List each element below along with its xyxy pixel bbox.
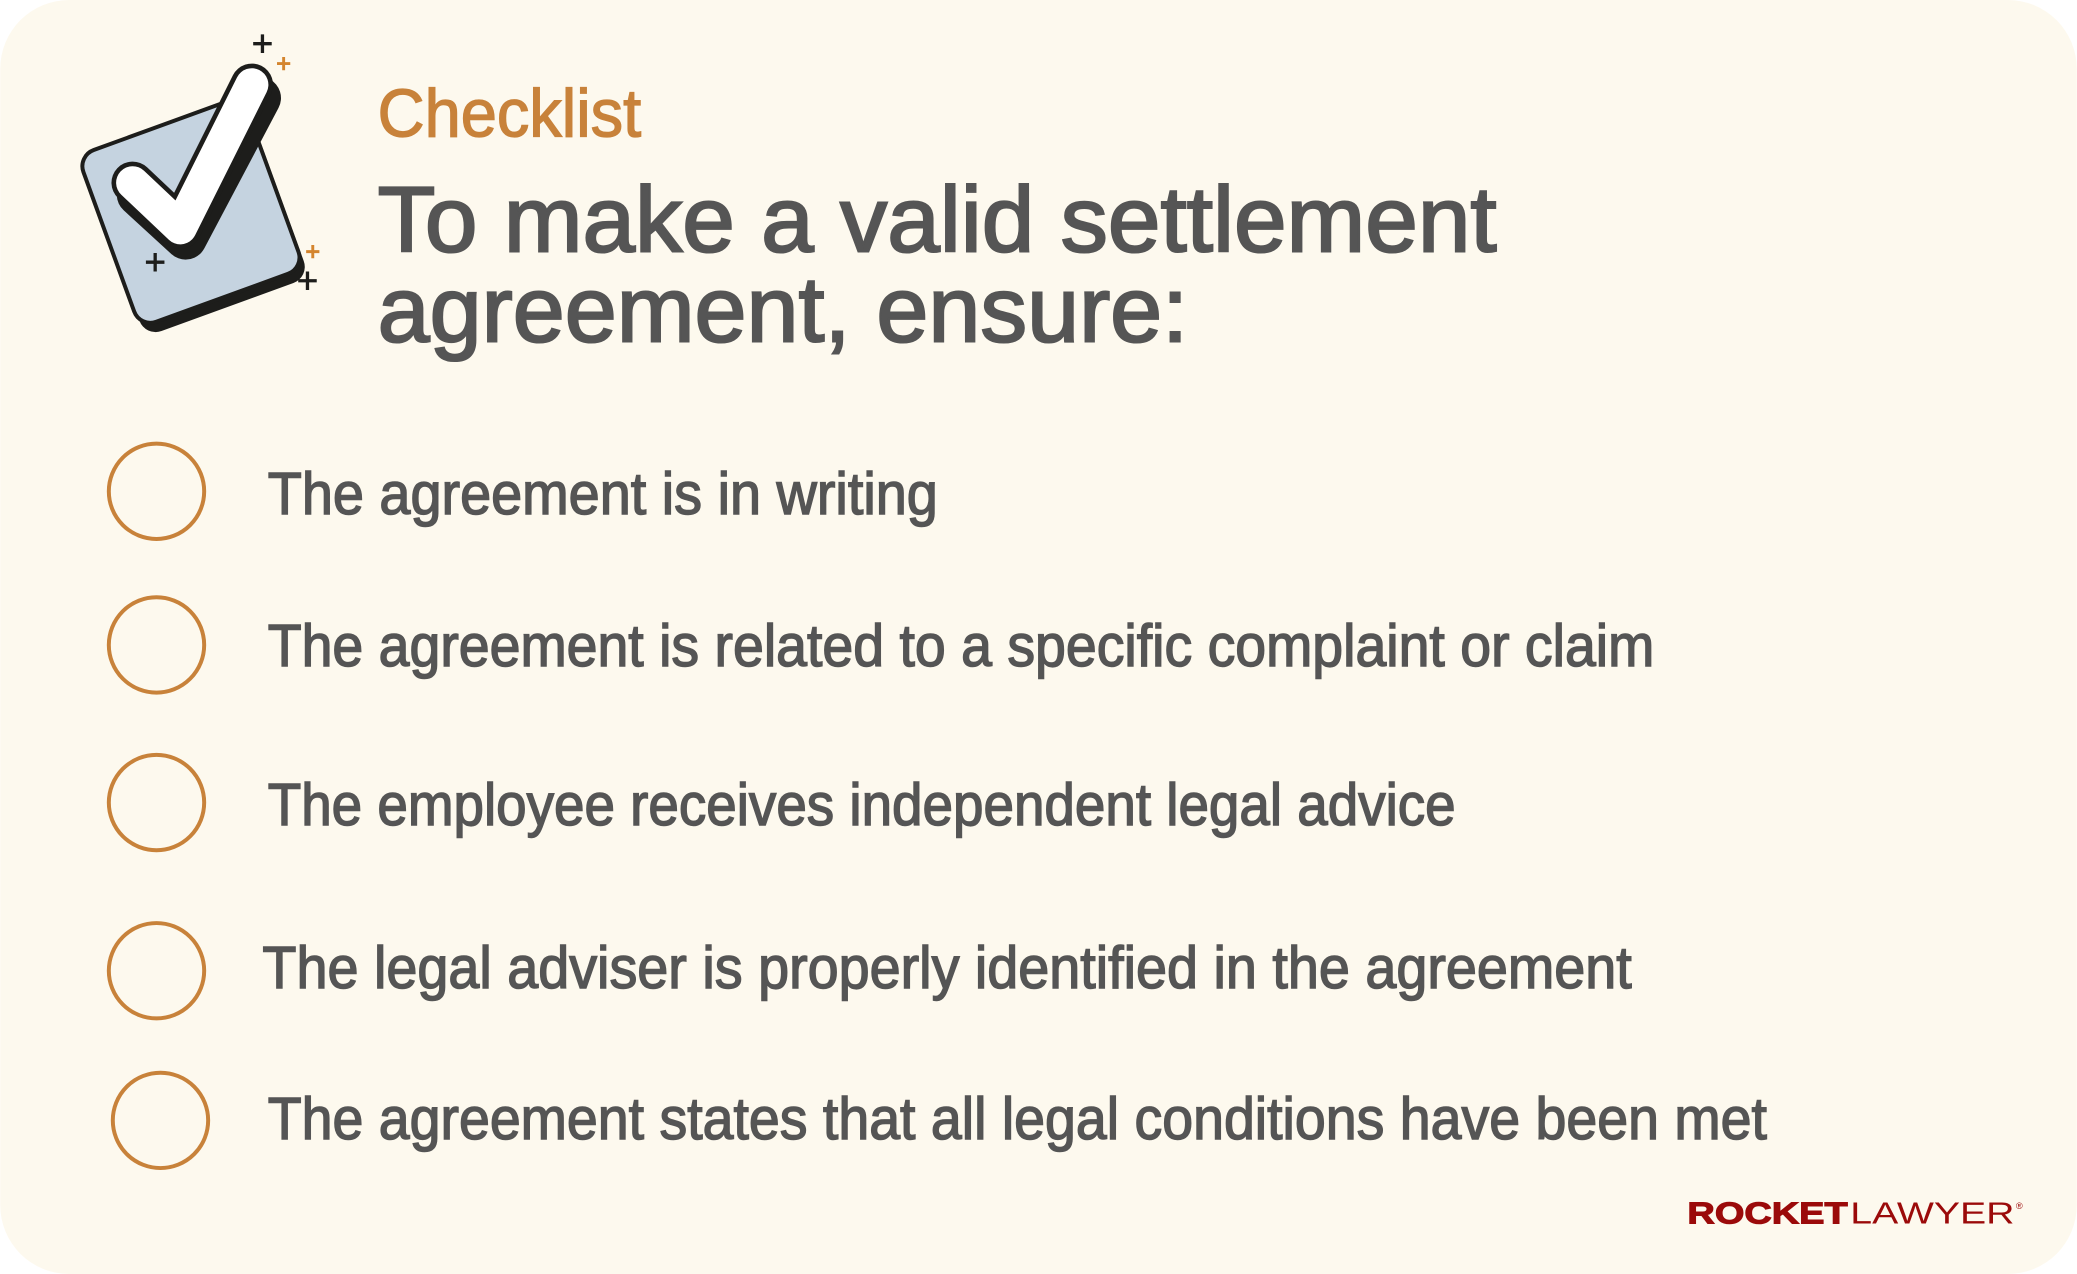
item 4: [109, 923, 1632, 1018]
item 3: The employee receives independent legal advice: [268, 771, 1456, 838]
item 2: [109, 597, 1654, 693]
item 4: The legal adviser is properly identified in the agreement: [262, 934, 1632, 1001]
label: Checklist: Checklist: [378, 76, 641, 151]
item 5: The agreement states that all legal conditions have been met: [268, 1085, 1767, 1152]
logo: Rocket Lawyer: ROCKET: [1687, 1197, 1848, 1231]
item 3: [109, 755, 1456, 850]
title: [378, 168, 1497, 362]
item 2: The agreement is related to a specific complaint or claim: [268, 612, 1654, 679]
checklist items: [109, 444, 1767, 1168]
item 1: [109, 444, 938, 539]
title: agreement, ensure:: [378, 258, 1188, 362]
logo: Rocket Lawyer: LAWYER: [1850, 1197, 2015, 1231]
icon: checkbox with check mark: [78, 34, 319, 337]
logo: Rocket Lawyer: [1687, 1197, 2023, 1231]
title: To make a valid settlement: [378, 168, 1497, 272]
logo: Rocket Lawyer: ®: [2016, 1201, 2023, 1211]
item 1: The agreement is in writing: [268, 460, 938, 527]
item 5: [113, 1073, 1767, 1168]
